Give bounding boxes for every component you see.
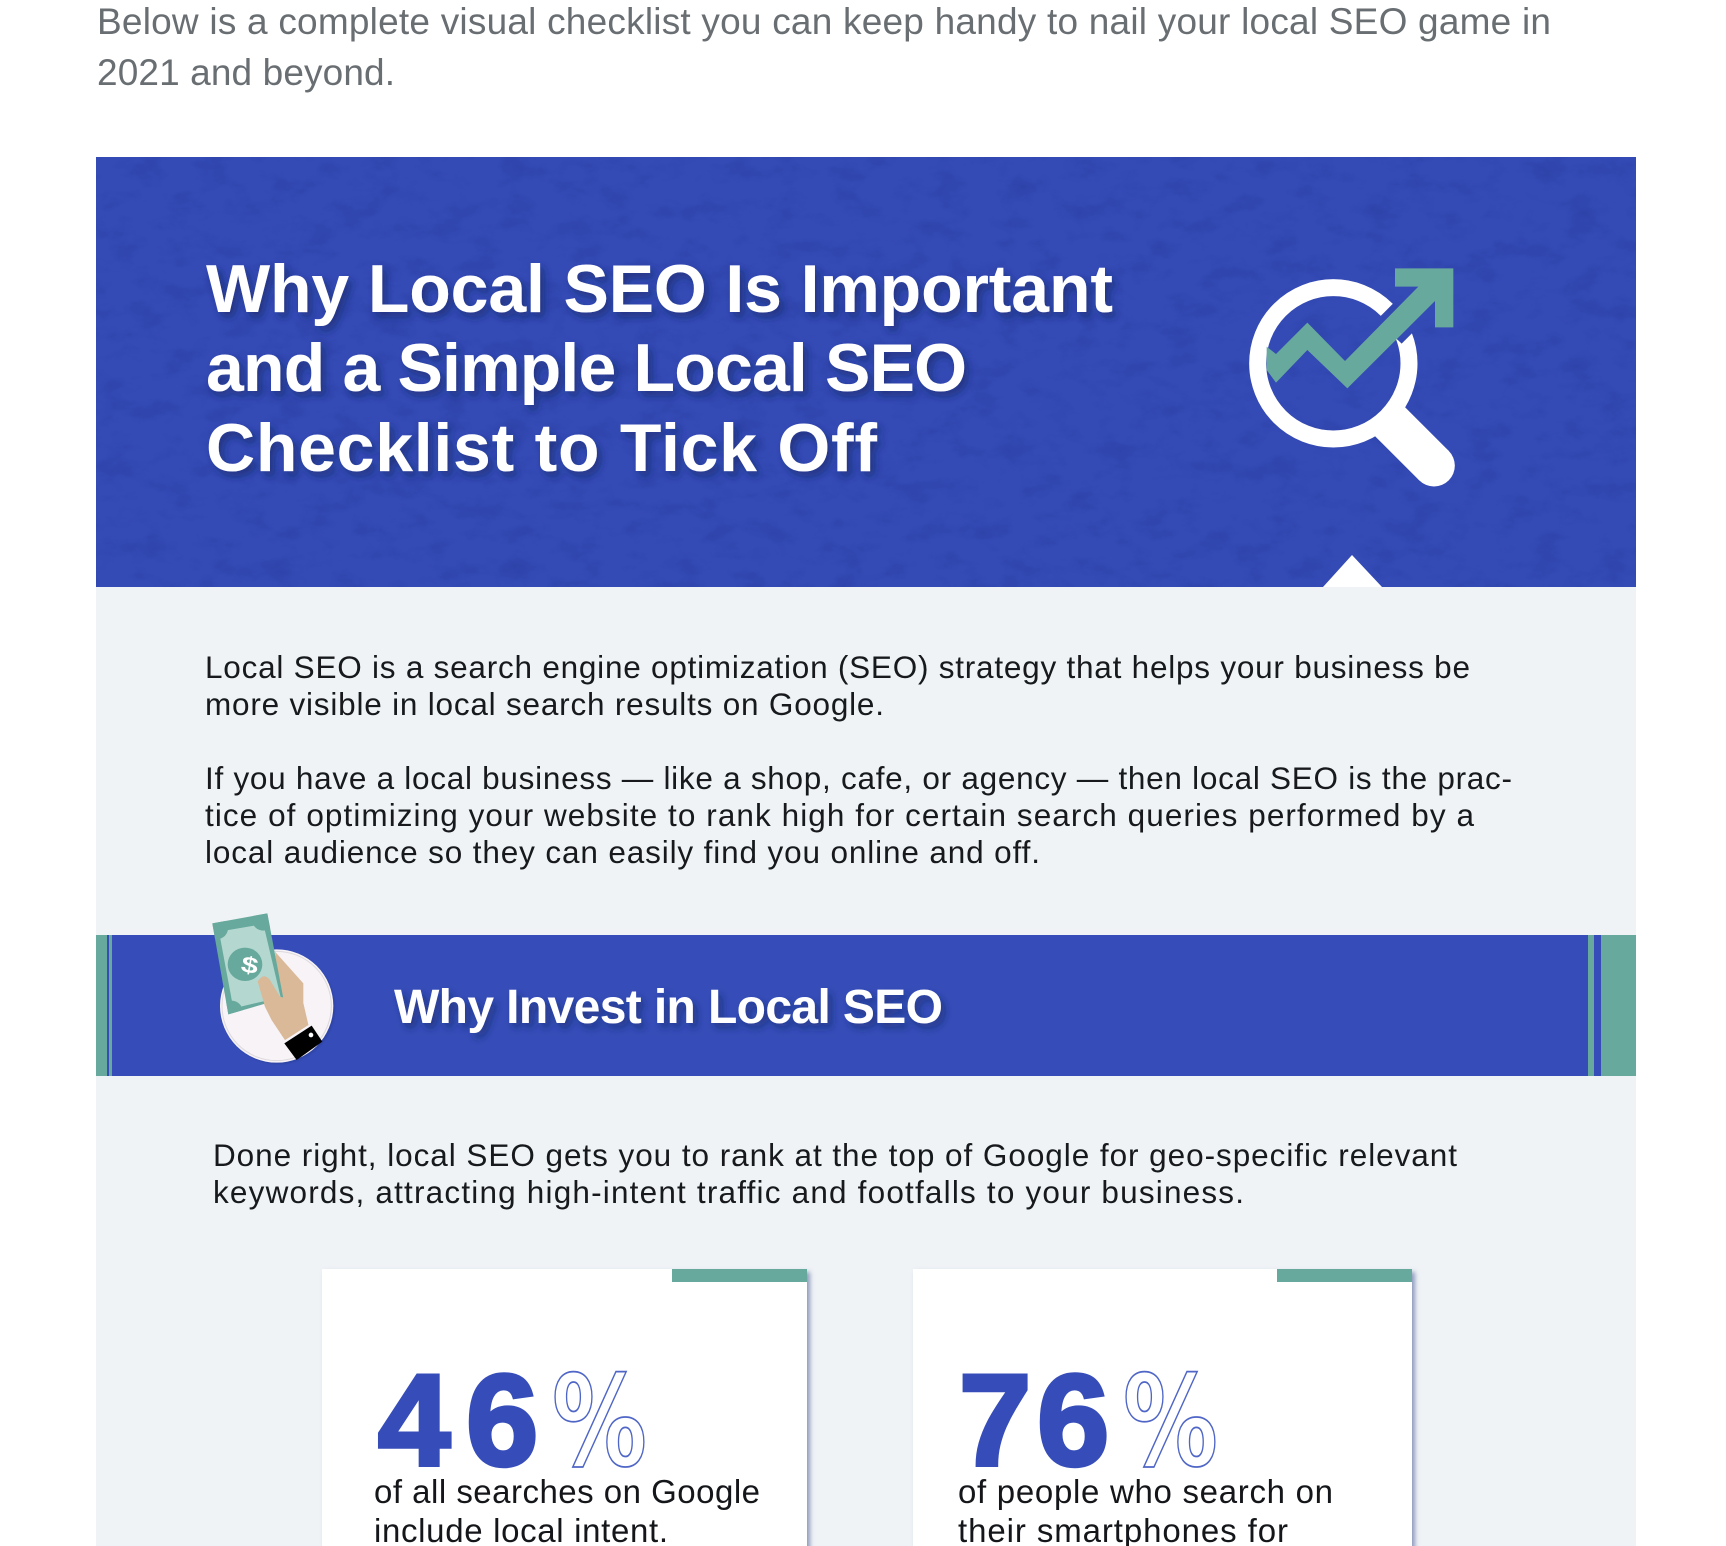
- icon: hand holding money: [207, 908, 335, 1064]
- stat description: [958, 1473, 1333, 1546]
- intro text: 2021 and beyond.: [97, 52, 395, 93]
- title: and a Simple Local SEO: [206, 330, 967, 406]
- stat description: [374, 1473, 760, 1546]
- definition text: [205, 649, 1512, 870]
- panel: hero banner: [96, 157, 1636, 587]
- title: Checklist to Tick Off: [206, 410, 877, 486]
- percent sign outline: %: [1123, 1350, 1218, 1495]
- title: Why Local SEO Is Important: [206, 251, 1113, 327]
- icon: hand holding money: $: [239, 951, 260, 979]
- panel: stat card 76%: [913, 1269, 1415, 1546]
- panel: page background: [96, 587, 1636, 1546]
- supporting text: [213, 1137, 1457, 1210]
- definition text: more visible in local search results on Google.: [205, 686, 884, 722]
- section heading: Why Invest in Local SEO: [394, 981, 943, 1034]
- definition text: tice of optimizing your website to rank high for certain search queries performed by a: [205, 797, 1474, 833]
- panel: stat card 46%: [322, 1269, 810, 1546]
- icon: magnifier with growth arrow: [1258, 268, 1455, 486]
- percent sign outline: %: [552, 1350, 647, 1495]
- definition text: If you have a local business — like a shop, cafe, or agency — then local SEO is the prac-: [205, 760, 1512, 796]
- stat description: of people who search on: [958, 1473, 1333, 1510]
- intro text: [97, 1, 1551, 93]
- stat description: of all searches on Google: [374, 1473, 760, 1510]
- supporting text: keywords, attracting high-intent traffic and footfalls to your business.: [213, 1174, 1244, 1210]
- supporting text: Done right, local SEO gets you to rank at the top of Google for geo-specific relevant: [213, 1137, 1457, 1173]
- pointer triangle: [1323, 555, 1382, 587]
- definition text: Local SEO is a search engine optimization (SEO) strategy that helps your business be: [205, 649, 1470, 685]
- panel: section band: [96, 908, 1636, 1076]
- title: [206, 251, 1113, 486]
- definition text: local audience so they can easily find you online and off.: [205, 834, 1040, 870]
- stat number: 76: [959, 1347, 1109, 1493]
- intro text: Below is a complete visual checklist you can keep handy to nail your local SEO game in: [97, 1, 1551, 42]
- stat number: 46: [378, 1347, 538, 1493]
